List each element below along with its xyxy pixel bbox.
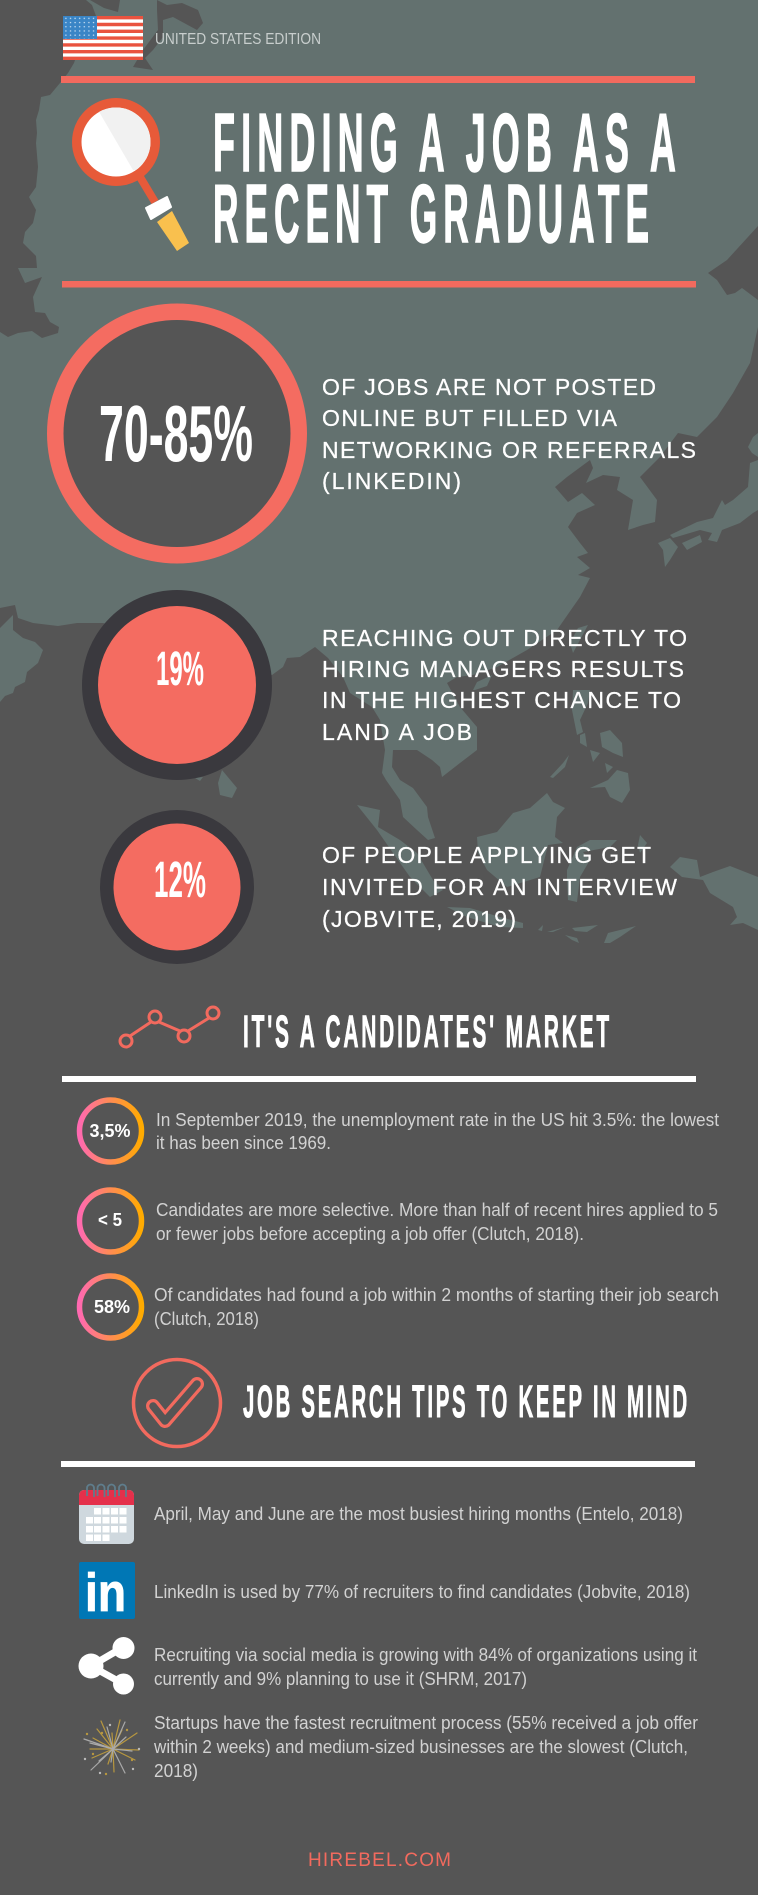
stat text: hiring managers [322,625,687,745]
tip text: startups: 2018) [154,1761,198,1781]
tip text: LinkedIn recruiters: LinkedIn is used by 77% of recruiters to find candidates (Jobvite, 2018) [154,1582,690,1602]
icon: check mark in circle [134,1360,220,1446]
white rule [62,1076,696,1082]
white rule [61,1461,695,1467]
stat circle: 19%: 19% [156,643,204,696]
market item: fewer than 5: or fewer jobs before accepting a job offer (Clutch, 2018). [156,1224,584,1244]
stat circle: 70-85% [47,304,307,564]
stat text: hiring managers: REACHING OUT DIRECTLY TO [322,625,687,651]
stat circle: 19% [82,590,272,780]
icon: share [78,1637,134,1694]
stat text: jobs not posted: ONLINE BUT FILLED VIA [322,405,618,431]
stat text: jobs not posted: (LINKEDIN) [322,468,461,494]
stat text: hiring managers: IN THE HIGHEST CHANCE TO [322,687,681,713]
tip text: startups [153,1713,698,1781]
stat text: jobs not posted: OF JOBS ARE NOT POSTED [322,374,656,400]
market item: 3,5% [80,1100,719,1162]
market item: 58%: (Clutch, 2018) [154,1309,259,1329]
stat text: interviews [322,842,677,932]
second coral rule [62,281,696,288]
tip text: social media: currently and 9% planning to use it (SHRM, 2017) [154,1669,527,1689]
icon: US flag [63,16,143,60]
icon: line chart [120,1007,219,1047]
stat text: jobs not posted: NETWORKING OR REFERRALS [322,437,696,463]
tip text: startups: Startups have the fastest recruitment process (55% received a job offer [154,1713,698,1733]
stat text: jobs not posted [322,374,696,494]
tip text: startups: within 2 weeks) and medium-sized businesses are the slowest (Clutch, [153,1737,688,1757]
icon: LinkedIn: in [85,1563,126,1623]
market item: 3,5%: 3,5% [90,1121,130,1141]
edition label: UNITED STATES EDITION [155,31,321,48]
market item: fewer than 5: < 5 [98,1210,122,1230]
stat text: interviews: OF PEOPLE APPLYING GET [322,842,651,868]
market item: 58%: Of candidates had found a job within 2 months of starting their job search [154,1285,719,1305]
dark water at top of map [90,0,203,70]
market item: fewer than 5: Candidates are more selective. More than half of recent hires applied to 5 [156,1200,718,1220]
market item: fewer than 5 [80,1190,718,1252]
icon: magnifying glass [72,90,189,251]
market item: 3,5%: it has been since 1969. [156,1133,331,1153]
tip text: busiest months: April, May and June are the most busiest hiring months (Entelo, 2018) [154,1504,683,1524]
footer: website: HIREBEL.COM [308,1850,451,1871]
market item: 58% [80,1276,719,1338]
icon: firework burst [84,1720,140,1775]
icon: calendar [79,1485,134,1544]
top coral rule [61,76,695,83]
stat text: hiring managers: HIRING MANAGERS RESULTS [322,656,684,682]
title [213,96,682,260]
stat circle: 12%: 12% [154,851,206,908]
market item: 58%: 58% [94,1297,130,1317]
tip text: social media [154,1645,697,1689]
tip text: social media: Recruiting via social media is growing with 84% of organizations using it [154,1645,697,1665]
market item: 3,5%: In September 2019, the unemployment rate in the US hit 3.5%: the lowest [156,1110,719,1130]
stat circle: 70-85%: 70-85% [99,389,253,478]
stat text: hiring managers: LAND A JOB [322,719,472,745]
background map of Asia [0,0,758,943]
stat circle: 12% [100,810,254,964]
stat text: interviews: INVITED FOR AN INTERVIEW [322,874,677,900]
stat text: interviews: (JOBVITE, 2019) [322,906,516,932]
